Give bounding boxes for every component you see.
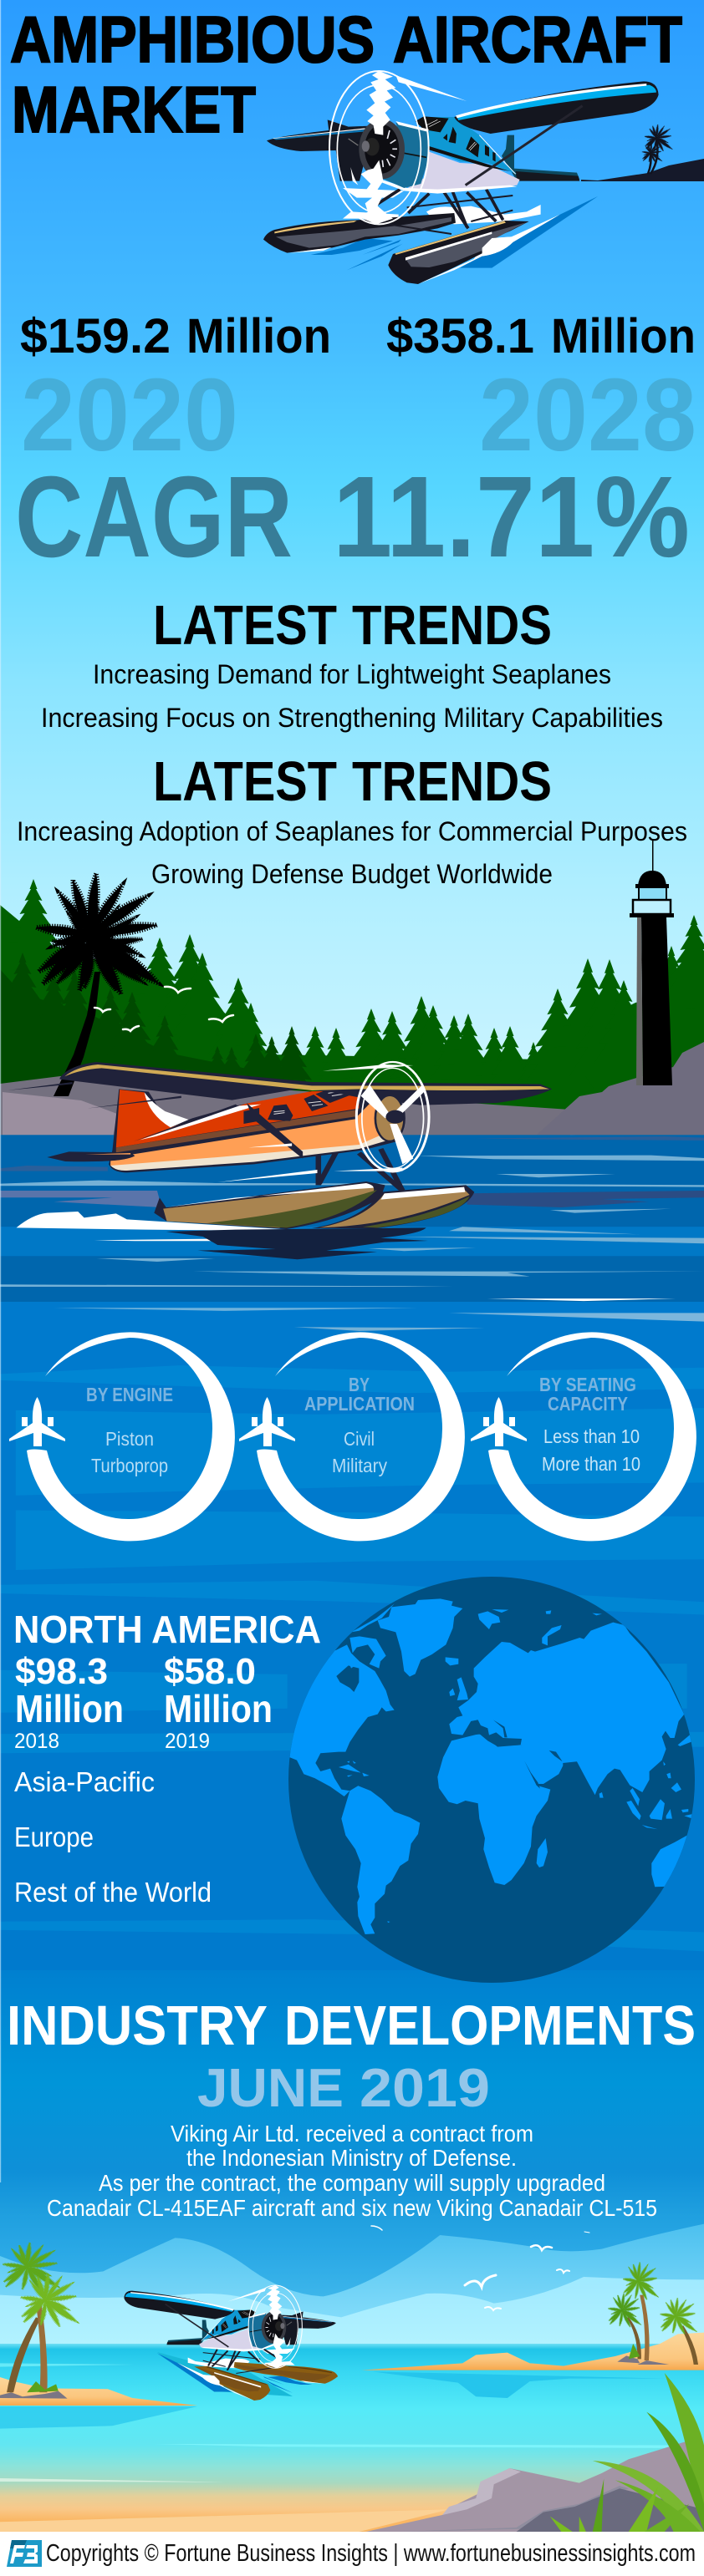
- segment: by application: [239, 1332, 465, 1541]
- regional figures: 2018: [14, 1730, 59, 1753]
- segment: by engine: Piston: [105, 1428, 154, 1450]
- segment: by seating capacity: [471, 1332, 696, 1541]
- island silhouette with palm: [581, 124, 704, 181]
- regional figures: 2019: [165, 1730, 210, 1753]
- segmentation background: [0, 1287, 704, 1970]
- propeller: [217, 1062, 429, 1182]
- foliage: [665, 2373, 704, 2532]
- segment: by seating capacity: More than 10: [542, 1453, 640, 1475]
- segment: by application: BY: [349, 1374, 370, 1395]
- development description: Viking Air Ltd. received a contract from: [171, 2121, 533, 2147]
- regional figures: Million: [15, 1687, 124, 1730]
- regional figures: Asia-Pacific: [14, 1766, 155, 1797]
- left edge line: [0, 0, 1, 2182]
- regional figures: [13, 1608, 321, 1908]
- segment: by engine: [9, 1332, 235, 1541]
- struts: [319, 1143, 402, 1191]
- years: 2020: [21, 358, 238, 473]
- title: AMPHIBIOUS: [10, 3, 375, 76]
- bottom sky: [0, 1970, 704, 2345]
- latest trends block two: Increasing Adoption of Seaplanes for Commercial Purposes: [17, 816, 687, 846]
- lake scene: forest: [0, 879, 704, 1120]
- development description: the Indonesian Ministry of Defense.: [186, 2145, 517, 2171]
- market values: [20, 309, 696, 363]
- latest trends block one: LATEST: [153, 594, 337, 657]
- footer: [0, 2532, 704, 2576]
- heading: industry developments: [7, 1994, 696, 2118]
- latest trends block one: Increasing Focus on Strengthening Military Capabilities: [41, 703, 663, 733]
- latest trends block two: Growing Defense Budget Worldwide: [151, 859, 553, 889]
- left island: [0, 2377, 197, 2406]
- sky background: [0, 0, 704, 1136]
- development description: As per the contract, the company will supply upgraded: [99, 2170, 605, 2196]
- regional figures: Europe: [14, 1821, 94, 1852]
- logo: [7, 2540, 42, 2567]
- CAGR: [15, 453, 690, 582]
- latest trends block two: LATEST: [153, 750, 337, 813]
- lighthouse: [630, 840, 674, 1085]
- tail and fuselage: [47, 1088, 405, 1172]
- beach birds: [371, 2226, 589, 2310]
- regional figures: $98.3: [15, 1651, 108, 1692]
- water reflections: [373, 2371, 665, 2398]
- small seaplane: [124, 2285, 338, 2401]
- years: [21, 358, 696, 473]
- market values: $358.1: [386, 309, 534, 363]
- latest trends block one: Increasing Demand for Lightweight Seaplanes: [93, 659, 611, 689]
- birds: [94, 987, 233, 1031]
- wing: [8, 1062, 552, 1109]
- lake scene: rocks: [0, 1042, 704, 1146]
- heading: industry developments: 2019: [360, 2057, 490, 2118]
- latest trends block one: [41, 594, 663, 733]
- lake seaplane: [8, 1062, 552, 1259]
- regional figures: Rest of the World: [14, 1877, 212, 1908]
- wet sand wedge: [0, 2509, 449, 2532]
- title: [10, 3, 682, 146]
- segment: by engine: BY ENGINE: [86, 1384, 173, 1405]
- lake water: [0, 1135, 704, 1298]
- globe map: [284, 1577, 702, 1983]
- segment: by application: Military: [332, 1455, 387, 1476]
- heading: industry developments: JUNE: [197, 2057, 344, 2118]
- segment: by seating capacity: CAPACITY: [548, 1393, 628, 1415]
- palm tree: [36, 873, 159, 1096]
- segment: by application: APPLICATION: [304, 1393, 415, 1415]
- segment: by seating capacity: BY SEATING: [539, 1374, 636, 1395]
- market values: Million: [551, 309, 696, 363]
- rock formation: [366, 2441, 704, 2532]
- regional figures: NORTH AMERICA: [13, 1608, 321, 1651]
- market values: Million: [186, 309, 331, 363]
- latest trends block two: [17, 750, 687, 889]
- CAGR: CAGR: [15, 453, 293, 582]
- latest trends block one: TRENDS: [352, 594, 552, 657]
- wake: [17, 1212, 312, 1231]
- segment: by engine: Turboprop: [91, 1455, 168, 1476]
- market values: $159.2: [20, 309, 171, 363]
- palm trunks: [7, 2317, 40, 2392]
- segment: by application: Civil: [344, 1428, 375, 1450]
- beach palm crowns: [3, 2243, 696, 2335]
- years: 2028: [479, 358, 696, 473]
- floats: [154, 1181, 474, 1229]
- regional figures: Million: [164, 1687, 273, 1730]
- regional figures: $58.0: [164, 1651, 256, 1692]
- title: MARKET: [12, 73, 256, 146]
- development description: [47, 2121, 657, 2221]
- segment: by seating capacity: Less than 10: [543, 1425, 640, 1447]
- heading: industry developments: INDUSTRY: [7, 1994, 268, 2057]
- latest trends block two: TRENDS: [352, 750, 552, 813]
- illustration: blue seaplane: [263, 71, 659, 284]
- beach scene: [0, 2224, 704, 2532]
- right island: [361, 2333, 704, 2370]
- shadow: [166, 1227, 428, 1259]
